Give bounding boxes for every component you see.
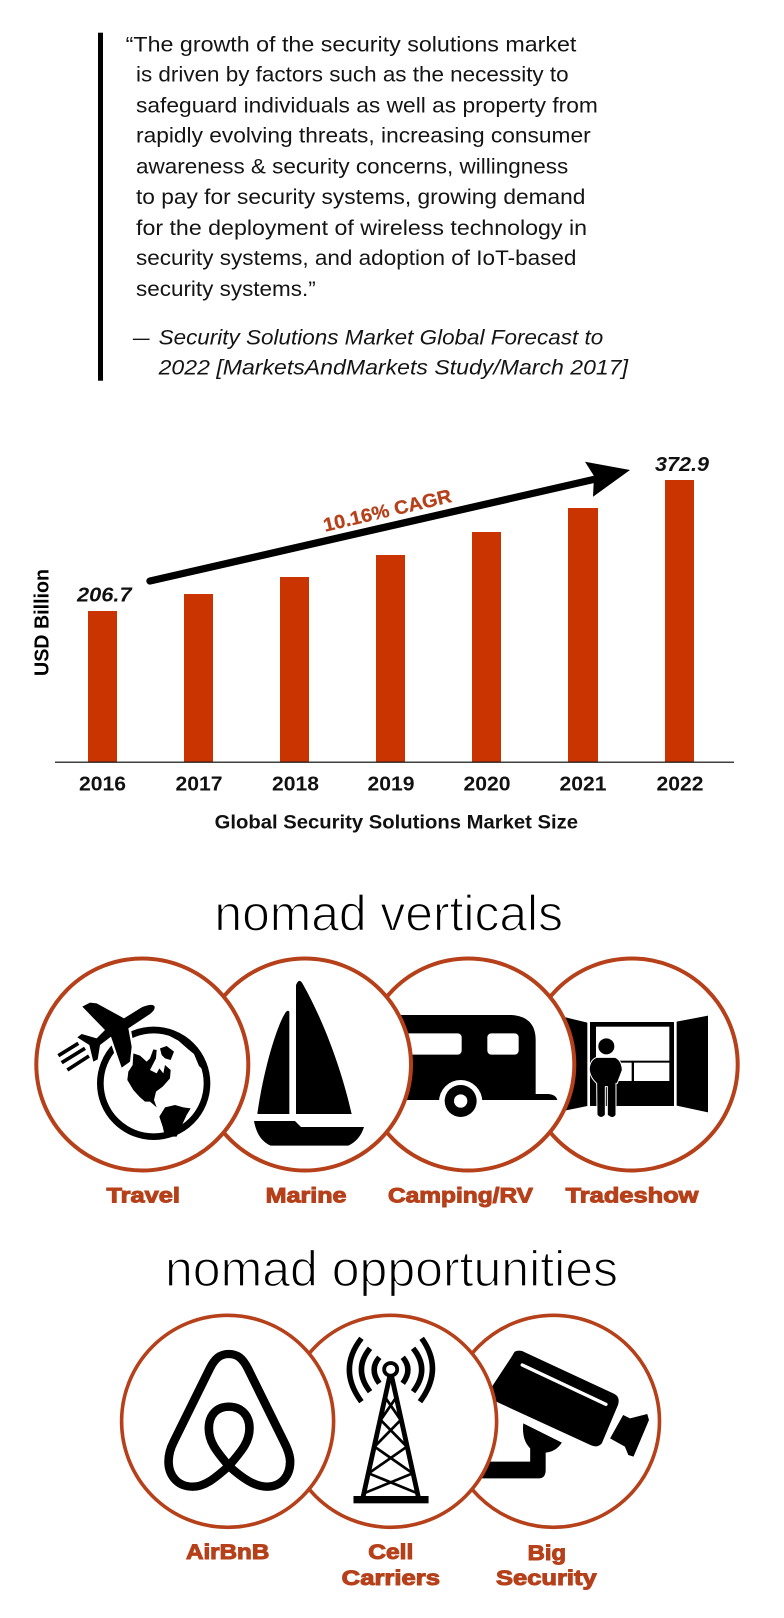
quote text: for the deployment of wireless technology in xyxy=(136,217,587,240)
year labels: 2020 xyxy=(464,774,510,796)
quote attribution: 2022 [MarketsAndMarkets Study/March 2017] xyxy=(158,356,629,379)
bar chart: global security solutions market size xyxy=(30,454,734,833)
growth arrow xyxy=(150,462,630,581)
value label 2022: 372.9 xyxy=(655,454,710,476)
quote text: “The growth of the security solutions market xyxy=(126,34,577,57)
opportunity labels xyxy=(186,1541,597,1590)
vertical labels: Marine xyxy=(266,1185,346,1208)
vertical labels: Travel xyxy=(106,1185,180,1208)
quote text: to pay for security systems, growing demand xyxy=(136,186,585,209)
quote text: security systems.” xyxy=(136,278,316,301)
circle: travel xyxy=(36,958,248,1170)
circle: camping xyxy=(362,958,574,1170)
year labels: 2019 xyxy=(368,774,414,796)
quote text: security systems, and adoption of IoT-based xyxy=(136,247,576,270)
year labels: 2022 xyxy=(656,774,704,796)
quote text: rapidly evolving threats, increasing consumer xyxy=(136,125,591,148)
opportunity labels: Big xyxy=(528,1542,566,1565)
vertical labels: Camping/RV xyxy=(388,1185,533,1208)
opportunity labels: Security xyxy=(496,1567,597,1590)
quote attribution xyxy=(132,326,629,379)
circle: big security xyxy=(448,1315,660,1527)
quote attribution: Security Solutions Market Global Forecast to xyxy=(159,326,604,349)
value label 2016: 206.7 xyxy=(76,585,133,607)
heading: nomad verticals: nomad verticals xyxy=(214,886,563,942)
opportunity labels: Cell xyxy=(368,1541,413,1564)
quote attribution: — xyxy=(132,326,150,349)
vertical labels xyxy=(106,1185,699,1208)
opportunity labels: Carriers xyxy=(342,1567,440,1590)
circle: tradeshow xyxy=(526,958,738,1170)
panel: nomad verticals circles xyxy=(36,958,738,1170)
quote accent bar xyxy=(98,33,103,381)
heading: nomad opportunities: nomad opportunities xyxy=(165,1241,618,1297)
quote text xyxy=(126,34,598,301)
quote text: awareness & security concerns, willingness xyxy=(136,155,568,178)
icon: sailboat xyxy=(254,981,364,1146)
icon: cell tower xyxy=(349,1338,432,1503)
opportunity labels: AirBnB xyxy=(186,1541,269,1564)
icon: tradeshow booth xyxy=(560,1016,708,1117)
icon: security camera xyxy=(468,1351,649,1478)
panel: market quote xyxy=(98,33,629,381)
year labels: 2016 xyxy=(79,774,126,796)
icon: camper trailer xyxy=(397,1015,557,1123)
year labels: 2017 xyxy=(176,774,222,796)
icon: plane and globe xyxy=(58,1003,209,1137)
bars xyxy=(88,480,694,762)
panel: nomad opportunities circles xyxy=(122,1315,660,1527)
vertical labels: Tradeshow xyxy=(566,1185,699,1208)
year labels xyxy=(79,774,704,796)
quote text: is driven by factors such as the necessity to xyxy=(136,64,569,87)
chart title: Global Security Solutions Market Size xyxy=(215,811,578,833)
CAGR label: 10.16% CAGR xyxy=(321,486,454,537)
x axis xyxy=(55,762,734,763)
year labels: 2021 xyxy=(560,774,606,796)
y axis label: USD Billion xyxy=(30,569,54,676)
quote text: safeguard individuals as well as property from xyxy=(136,95,598,118)
icon: airbnb logo xyxy=(169,1354,290,1487)
circle: cell carriers xyxy=(285,1315,497,1527)
circle: airbnb xyxy=(122,1315,334,1527)
year labels: 2018 xyxy=(272,774,319,796)
circle: marine xyxy=(199,958,411,1170)
